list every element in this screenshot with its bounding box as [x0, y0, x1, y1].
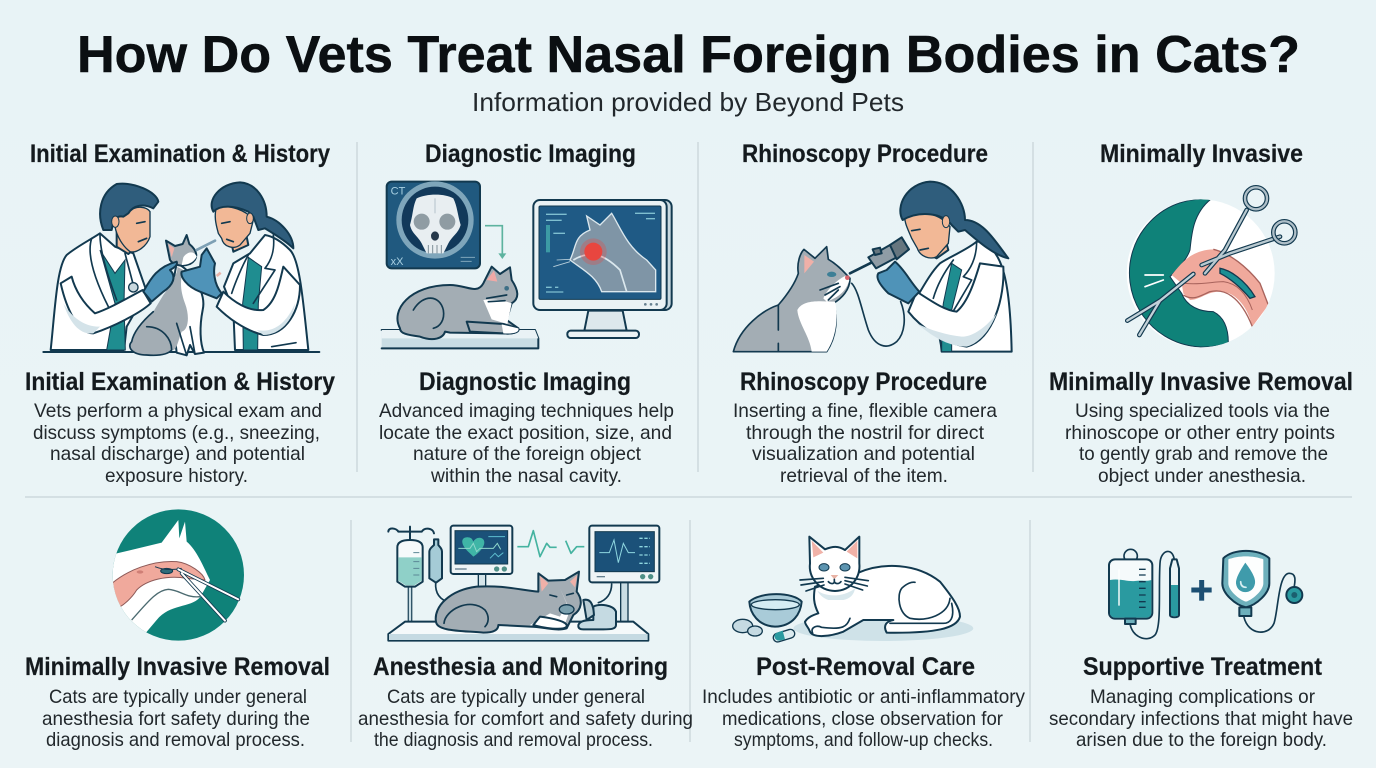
text block: anesthesia: the diagnosis and removal process.: [374, 729, 653, 751]
text block: supportive treatment: Managing complications or: [1090, 686, 1315, 708]
illustration: white cat with bowl and pills: [733, 537, 973, 643]
illustration: two vets examining a cat: [43, 182, 319, 355]
text block: post-removal: Includes antibiotic or anti-inflammatory: [702, 686, 1025, 708]
text block: diagnostic imaging: [379, 400, 674, 487]
text block: anesthesia: anesthesia for comfort and safety during: [358, 708, 693, 730]
text block: diagnostic imaging: nature of the foreign object: [413, 443, 642, 465]
text block: initial examination: exposure history.: [105, 465, 248, 487]
illustration: anesthetized cat with monitors: [388, 526, 659, 641]
text block: supportive treatment: [1049, 686, 1353, 751]
text block: rhinoscopy: retrieval of the item.: [780, 465, 948, 487]
text block: anesthesia: Cats are typically under general: [387, 686, 645, 708]
text block: minimally invasive removal: [1065, 400, 1335, 487]
text block: diagnostic imaging: locate the exact position, size, and: [379, 422, 672, 444]
heading: initial examination: Initial Examination & History: [25, 368, 335, 396]
text block: minimally invasive bottom: Cats are typically under general: [49, 686, 307, 708]
heading: initial examination top: Initial Examination & History: [30, 140, 330, 168]
text block: minimally invasive removal: rhinoscope or other entry points: [1065, 422, 1335, 444]
text block: minimally invasive removal: object under anesthesia.: [1098, 465, 1306, 487]
text block: minimally invasive bottom: [42, 686, 310, 751]
text block: initial examination: discuss symptoms (e.g., sneezing,: [33, 422, 320, 444]
subtitle: Information provided by Beyond Pets: [472, 87, 904, 117]
illustration: CT scan, cat and monitor: xX: [391, 256, 404, 268]
panel: anesthesia and monitoring: [358, 526, 693, 751]
panel: minimally invasive bottom: [25, 509, 330, 751]
heading: minimally invasive top: Minimally Invasive: [1100, 140, 1303, 168]
text block: minimally invasive removal: to gently grab and remove the: [1079, 443, 1328, 465]
text block: supportive treatment: secondary infections that might have: [1049, 708, 1353, 730]
illustration: CT scan, cat and monitor: [382, 181, 672, 348]
heading: post-removal: Post-Removal Care: [756, 653, 975, 681]
panel: diagnostic imaging: [379, 140, 674, 487]
text block: initial examination: nasal discharge) and potential: [50, 443, 305, 465]
heading: rhinoscopy top: Rhinoscopy Procedure: [742, 140, 988, 168]
text block: minimally invasive bottom: diagnosis and removal process.: [46, 729, 305, 751]
heading: minimally invasive removal bottom: Minimally Invasive Removal: [25, 653, 330, 681]
illustration: CT scan, cat and monitor: CT: [391, 185, 406, 197]
panel: rhinoscopy procedure: [733, 140, 1012, 487]
panel: supportive treatment: [1049, 549, 1353, 751]
illustration: forceps in cat nasal cross-section: [1127, 187, 1295, 347]
illustration: tweezers in nasal cavity: [110, 509, 244, 643]
panel: post-removal care: [702, 537, 1025, 751]
title: How Do Vets Treat Nasal Foreign Bodies in Cats?: [77, 26, 1300, 84]
text block: rhinoscopy: Inserting a fine, flexible camera: [733, 400, 997, 422]
text block: initial examination: Vets perform a physical exam and: [34, 400, 322, 422]
text block: supportive treatment: arisen due to the foreign body.: [1076, 729, 1327, 751]
heading: anesthesia: Anesthesia and Monitoring: [373, 653, 668, 681]
text block: post-removal: [702, 686, 1025, 751]
illustration: vet using rhinoscope on cat: [733, 182, 1012, 352]
panel: minimally invasive top: [1049, 140, 1353, 487]
text block: rhinoscopy: through the nostril for direct: [746, 422, 985, 444]
text block: diagnostic imaging: Advanced imaging techniques help: [379, 400, 674, 422]
text block: rhinoscopy: [733, 400, 997, 487]
text block: anesthesia: [358, 686, 693, 751]
text block: minimally invasive removal: Using specialized tools via the: [1075, 400, 1330, 422]
text block: diagnostic imaging: within the nasal cavity.: [430, 465, 622, 487]
panel: initial examination: [25, 140, 335, 487]
text block: rhinoscopy: visualization and potential: [752, 443, 975, 465]
text block: post-removal: symptoms, and follow-up checks.: [734, 729, 993, 751]
heading: diagnostic imaging: Diagnostic Imaging: [419, 368, 631, 396]
heading: rhinoscopy: Rhinoscopy Procedure: [740, 368, 987, 396]
heading: minimally invasive removal: Minimally Invasive Removal: [1049, 368, 1353, 396]
text block: minimally invasive bottom: anesthesia fort safety during the: [42, 708, 310, 730]
text block: initial examination: [33, 400, 322, 487]
heading: supportive treatment: Supportive Treatment: [1083, 653, 1323, 681]
illustration: IV bags and plus sign: [1109, 549, 1302, 639]
heading: diagnostic imaging top: Diagnostic Imaging: [425, 140, 636, 168]
text block: post-removal: medications, close observation for: [722, 708, 1003, 730]
